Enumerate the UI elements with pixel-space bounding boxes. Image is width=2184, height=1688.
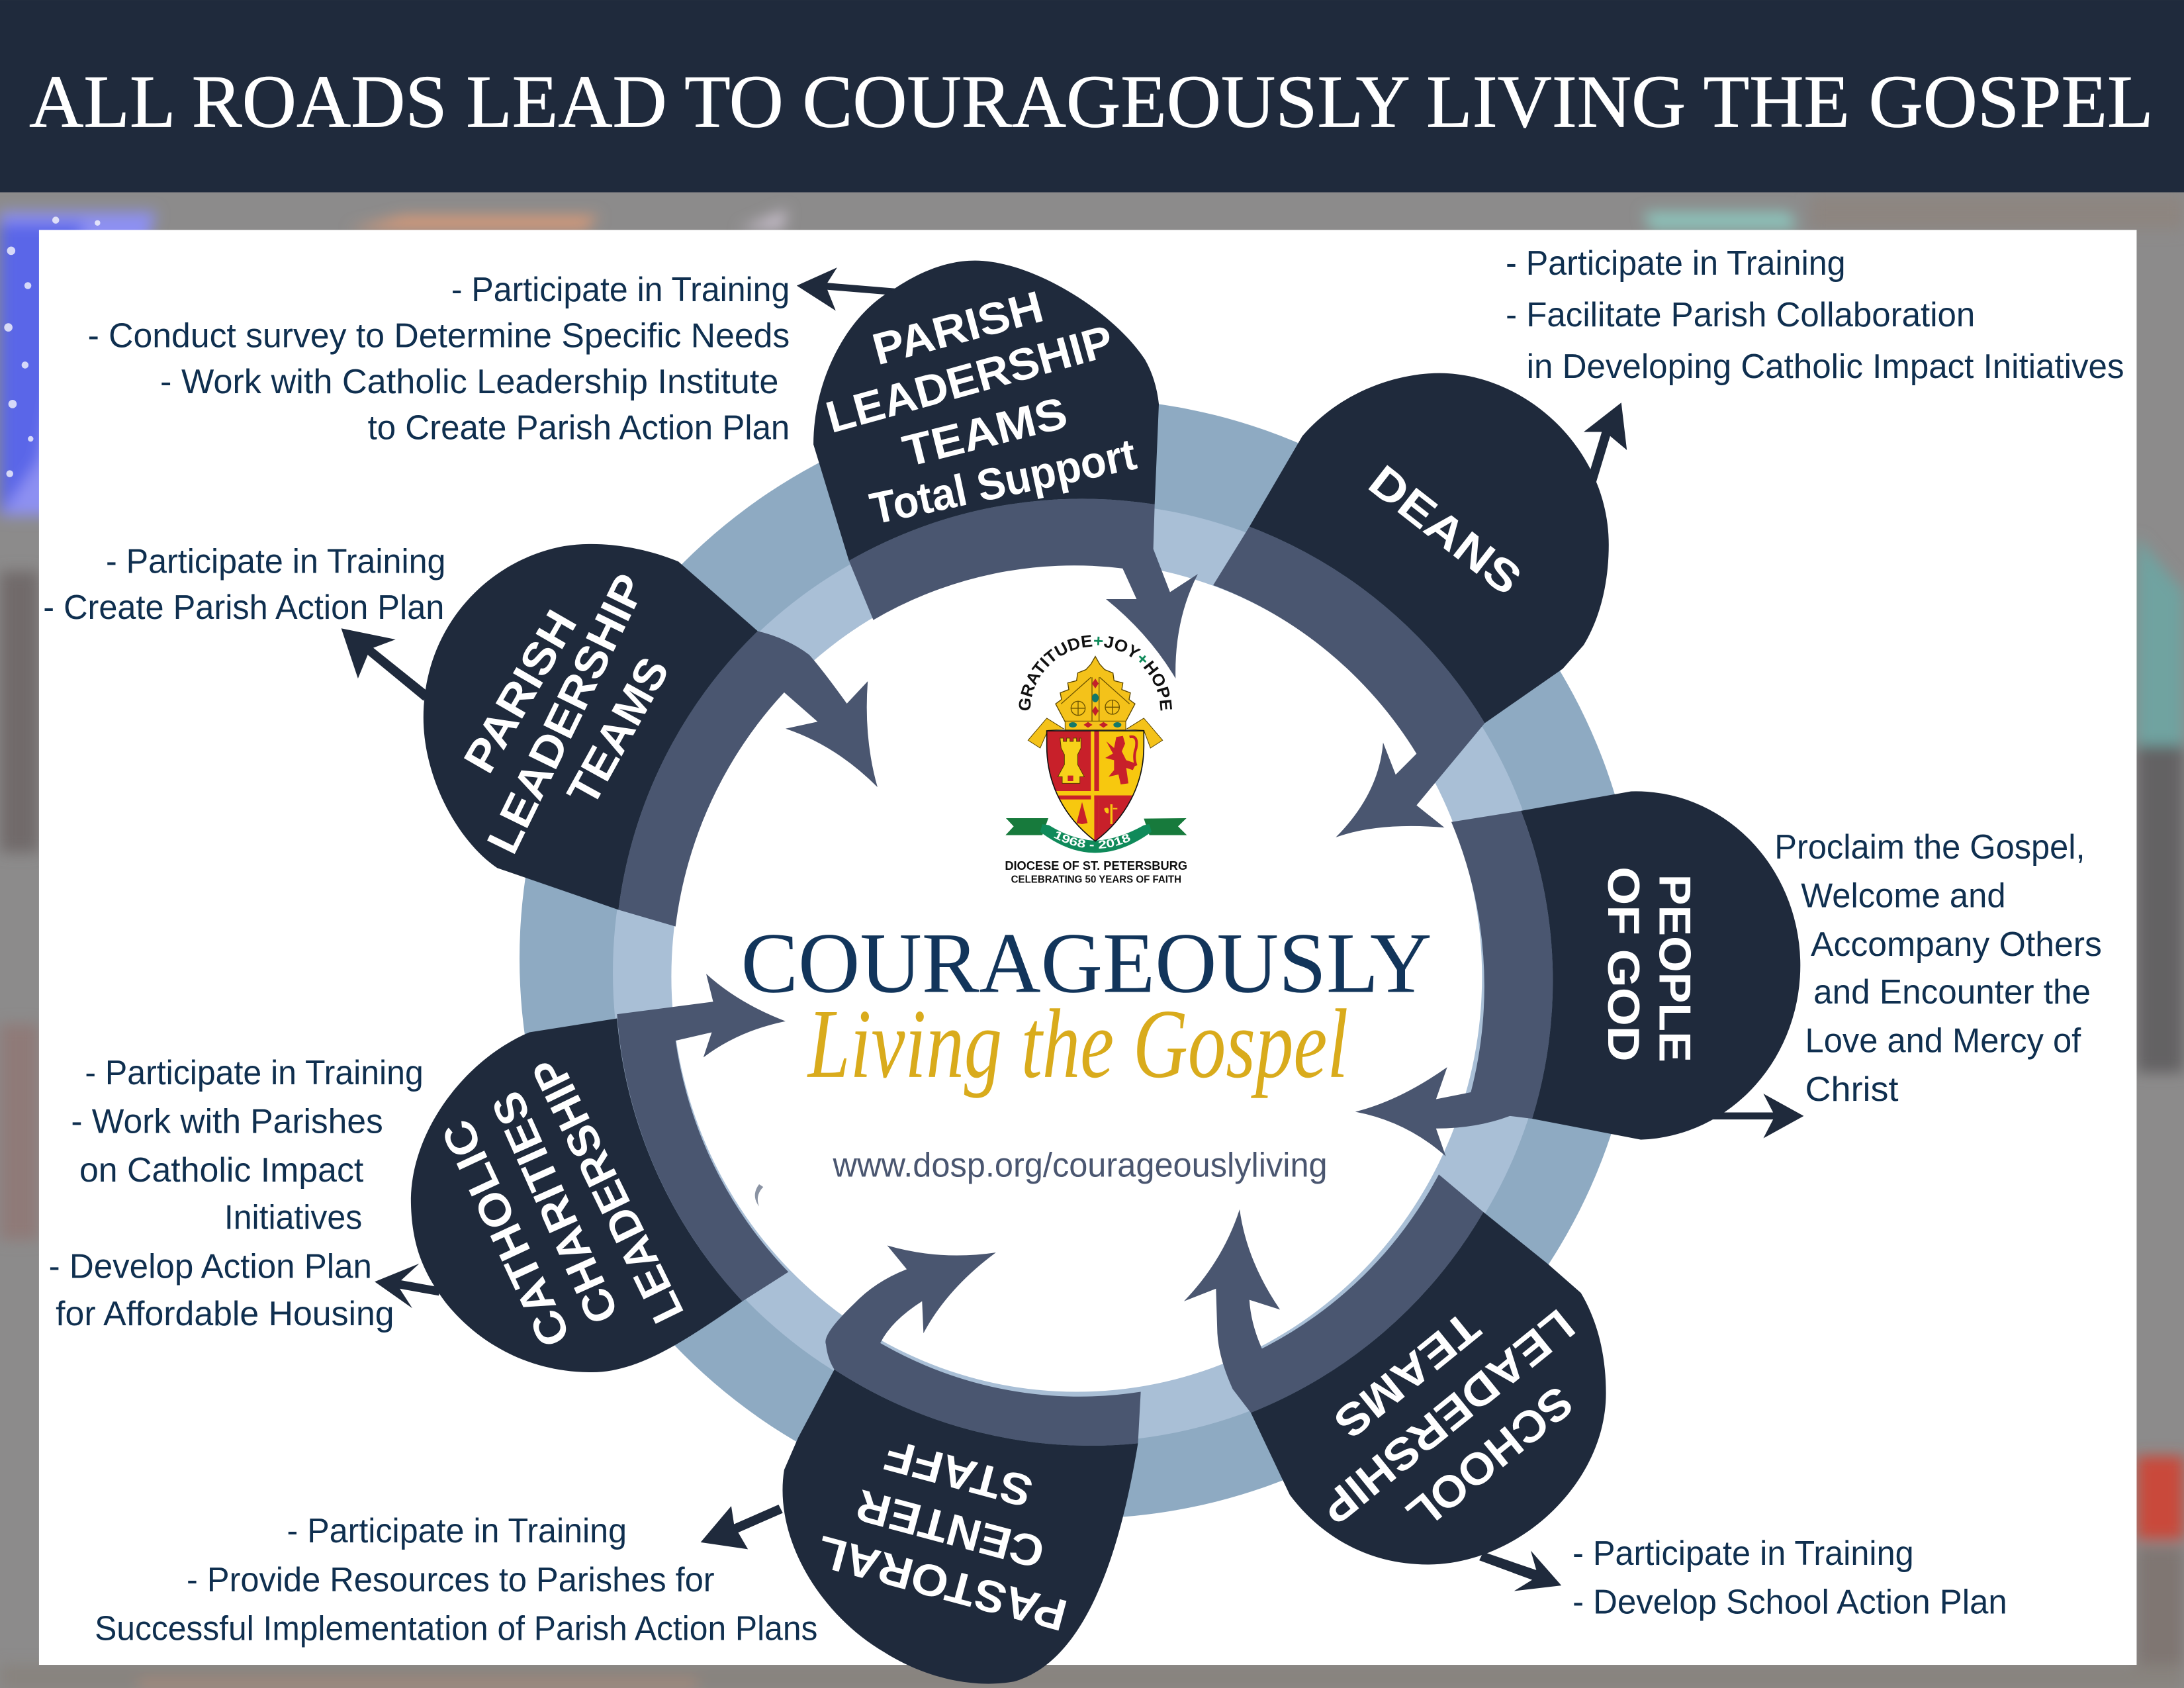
title banner [0, 0, 2184, 192]
text block: people of god duties: Accompany Others [1811, 925, 2102, 963]
logo caption [1005, 859, 1187, 885]
text block: school duties: - Develop School Action Plan [1572, 1583, 2007, 1621]
blob: left parish leadership teams: TEAMS [558, 649, 679, 814]
ribbon: 1968 - 2018 [1054, 831, 1130, 849]
blob: left parish leadership teams [424, 544, 758, 910]
text block: deans duties: - Facilitate Parish Collaboration [1506, 295, 1975, 334]
arrow: catholic [375, 1264, 440, 1308]
blob: school leadership teams: TEAMS [1325, 1301, 1489, 1448]
logo caption: CELEBRATING 50 YEARS OF FAITH [1011, 874, 1181, 885]
text block: people of god duties: and Encounter the [1813, 972, 2091, 1011]
blob: people of god: PEOPLE [1650, 874, 1700, 1062]
blob: pastoral center staff: STAFF [880, 1429, 1038, 1517]
blob: left parish leadership teams: PARISH [455, 602, 586, 781]
blob: school leadership teams: LEADERSHIP [1311, 1299, 1584, 1534]
swirl arrow: people of god [1355, 811, 1553, 1156]
center heading: courageously: COURAGEOUSLY [741, 916, 1432, 1011]
text block: people of god duties: Love and Mercy of [1805, 1021, 2081, 1059]
text block: people of god duties: Welcome and [1801, 876, 2006, 915]
blob: parish leadership teams total support: Total Support [866, 430, 1140, 534]
title: ALL ROADS LEAD TO COURAGEOUSLY LIVING THE GOSPEL [29, 60, 2154, 144]
text block: top parish duties [88, 270, 790, 446]
blob: pastoral center staff [782, 1370, 1138, 1684]
text block: catholic charities duties: for Affordable Housing [56, 1294, 394, 1333]
text block: left parish duties: - Create Parish Action Plan [43, 588, 444, 626]
text block: left parish duties: - Participate in Training [106, 541, 445, 580]
text block: top parish duties: - Work with Catholic Leadership Institute [160, 362, 778, 400]
text block: left parish duties [43, 541, 445, 626]
ribbon [1005, 818, 1187, 853]
text block: pastoral center duties [95, 1511, 817, 1648]
blob: parish leadership teams total support: TEAMS [898, 388, 1072, 477]
text block: school duties [1572, 1534, 2007, 1621]
arrow: people of god [1700, 1094, 1803, 1138]
swirl arrow: deans [1213, 527, 1484, 837]
center subheading: living the gospel: Living the Gospel [807, 990, 1348, 1099]
swirl arrow: left parish [618, 631, 878, 927]
text block: pastoral center duties: Successful Implementation of Parish Action Plans [95, 1609, 817, 1648]
blob: catholic charities leadership: CHARITIES [482, 1084, 629, 1331]
blob: school leadership teams: SCHOOL [1397, 1376, 1582, 1539]
text block: deans duties [1506, 244, 2124, 385]
swirl arrow: parish total support [849, 498, 1198, 679]
swirl arrow: catholic [617, 974, 788, 1301]
logo caption: DIOCESE OF ST. PETERSBURG [1005, 859, 1187, 872]
arrow: school [1479, 1550, 1561, 1591]
blob: pastoral center staff: CENTER [851, 1479, 1050, 1577]
blob: left parish leadership teams: LEADERSHIP [478, 567, 655, 861]
text block: deans duties: - Participate in Training [1506, 244, 1846, 282]
arrow: left parish [341, 628, 429, 701]
website url: www.dosp.org/courageouslyliving [833, 1145, 1328, 1184]
text block: pastoral center duties: - Participate in Training [287, 1511, 627, 1550]
text block: school duties: - Participate in Training [1572, 1534, 1914, 1572]
text block: catholic charities duties: - Develop Action Plan [49, 1246, 372, 1285]
logo: diocese coat of arms [1005, 635, 1187, 885]
arrow: deans [1584, 402, 1627, 482]
mitre [1028, 657, 1163, 748]
text block: deans duties: in Developing Catholic Impact Initiatives [1527, 347, 2124, 385]
text block: catholic charities duties [49, 1053, 424, 1333]
text block: catholic charities duties: - Participate in Training [85, 1053, 424, 1092]
thin arrows from blobs to text [341, 267, 1803, 1591]
shield [1046, 729, 1146, 842]
text block: catholic charities duties: Initiatives [224, 1198, 362, 1237]
blob: parish leadership teams total support: PARISH [868, 282, 1048, 375]
blob: people of god [1521, 791, 1800, 1140]
ring [520, 399, 1639, 1519]
text block: catholic charities duties: - Work with Parishes [71, 1102, 383, 1140]
text block: people of god duties [1774, 827, 2102, 1108]
blob: parish leadership teams total support: LEADERSHIP [821, 316, 1118, 443]
logo arc text: GRATITUDE+JOY+HOPE [1019, 635, 1172, 711]
blob: deans: DEANS [1359, 456, 1531, 605]
blob: catholic charities leadership: CATHOLIC [432, 1112, 580, 1354]
blob: school leadership teams [1251, 1212, 1606, 1564]
text block: top parish duties: to Create Parish Action Plan [368, 408, 790, 446]
blob: catholic charities leadership: LEADERSHIP [522, 1050, 694, 1331]
text block: catholic charities duties: on Catholic Impact [79, 1150, 363, 1189]
swirl arrow: pastoral [825, 1246, 1141, 1446]
blob: parish leadership teams total support [813, 261, 1159, 561]
text block: pastoral center duties: - Provide Resources to Parishes for [187, 1560, 715, 1599]
arrow: top parish [797, 267, 895, 310]
blob: catholic charities leadership [411, 1018, 743, 1372]
blob: deans [1250, 373, 1609, 723]
text block: people of god duties: Proclaim the Gospel, [1774, 827, 2085, 866]
text block: people of god duties: Christ [1805, 1070, 1899, 1108]
swirl arrow: school [1184, 1174, 1483, 1413]
blob: pastoral center staff: PASTORAL [811, 1526, 1072, 1640]
slate swirl arrows [617, 498, 1553, 1446]
arrow: pastoral [701, 1505, 783, 1549]
text block: top parish duties: - Participate in Training [451, 270, 790, 308]
blob: people of god: OF GOD [1598, 867, 1648, 1062]
text block: top parish duties: - Conduct survey to Determine Specific Needs [88, 316, 790, 355]
